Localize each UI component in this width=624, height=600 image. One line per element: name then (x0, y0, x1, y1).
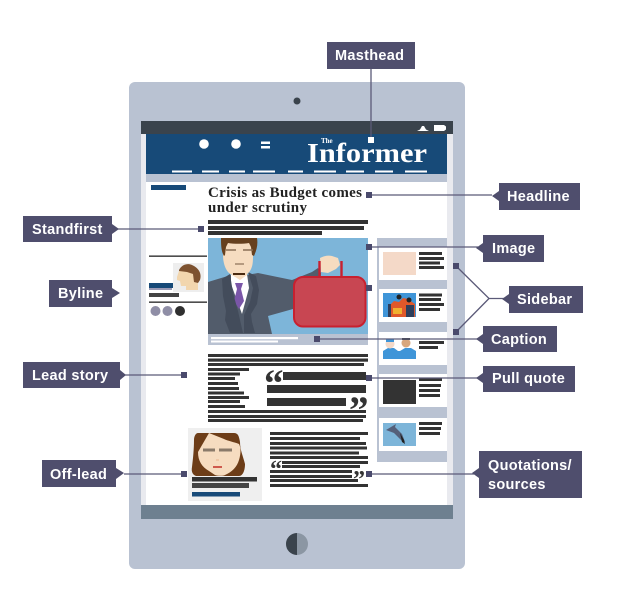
label: Pull quote (476, 366, 575, 392)
masthead title: The (321, 137, 333, 145)
byline portrait (173, 263, 204, 292)
tablet (129, 82, 465, 569)
label: Pull quote: Pull quote (492, 371, 565, 387)
label: Quotations/sources (472, 451, 582, 498)
label: Masthead (327, 42, 415, 69)
label: Byline: Byline (58, 286, 103, 302)
bottom bar (141, 505, 453, 519)
label: Sidebar (502, 286, 583, 313)
social icons (150, 306, 185, 316)
masthead title: Informer (307, 138, 427, 168)
label: Byline (49, 280, 120, 307)
label: Standfirst: Standfirst (32, 222, 103, 238)
menu items (172, 170, 427, 172)
sidebar (377, 238, 447, 462)
sidebar item 2 (383, 293, 444, 317)
section tag (151, 185, 186, 190)
status bar (141, 121, 453, 134)
pull quote (264, 362, 368, 432)
briefcase (294, 261, 366, 326)
sidebar item 1 (383, 252, 444, 275)
page (146, 174, 447, 506)
headline: under scrutiny (208, 200, 308, 216)
label: Quotations/sources: sources (488, 477, 546, 493)
label: Image (476, 235, 544, 262)
masthead (146, 134, 447, 182)
lead story text (208, 354, 368, 422)
standfirst (208, 220, 368, 235)
connector lines (118, 63, 504, 477)
main image (208, 238, 368, 345)
man (208, 238, 340, 334)
label: Sidebar: Sidebar (517, 292, 572, 308)
label: Caption (476, 326, 557, 352)
headline: Crisis as Budget comes (208, 185, 362, 201)
woman (192, 433, 245, 476)
label: Lead story (23, 362, 126, 388)
off-lead portrait (188, 428, 262, 501)
inline quote marks: ” (353, 467, 365, 493)
inline quote marks: “ (270, 457, 282, 483)
sidebar item 4 (383, 378, 442, 404)
headline (208, 185, 362, 216)
screen (141, 134, 453, 506)
off-lead text (270, 432, 368, 493)
label: Masthead: Masthead (335, 48, 404, 64)
byline (149, 256, 207, 316)
menu icons (199, 139, 270, 149)
label: Headline: Headline (507, 189, 570, 205)
label: Quotations/sources: Quotations/ (488, 458, 572, 474)
camera (294, 98, 300, 104)
opening quote marks: “ (264, 362, 284, 405)
label: Caption: Caption (491, 332, 547, 348)
label: Off-lead: Off-lead (50, 467, 107, 483)
label: Image: Image (492, 241, 535, 257)
caption bar (208, 334, 368, 345)
label: Standfirst (23, 216, 119, 242)
label: Lead story: Lead story (32, 368, 108, 384)
closing quote marks: ” (349, 389, 368, 432)
home button (286, 533, 308, 555)
label: Off-lead (42, 460, 124, 487)
label: Headline (492, 183, 580, 210)
sidebar item 3 (383, 338, 444, 359)
sidebar item 5 (383, 422, 442, 446)
inline quote marks (270, 457, 365, 493)
